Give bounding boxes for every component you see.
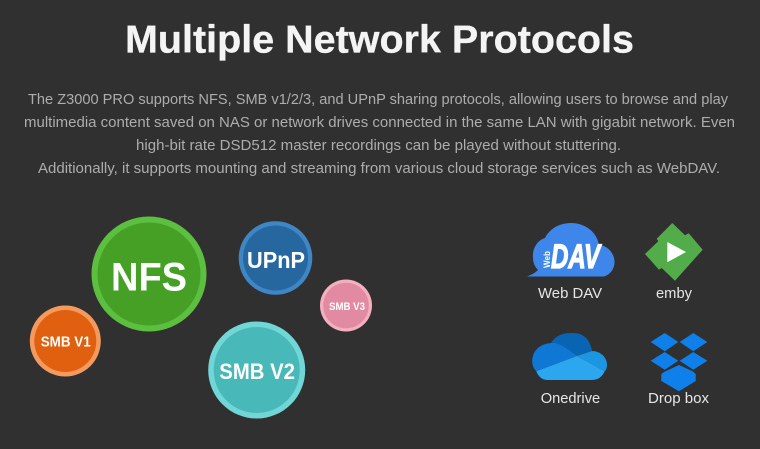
bubble: UPnP [239, 221, 312, 295]
icon: WebDAV cloud [527, 223, 614, 276]
bubble: SMB V2: SMB V2 [219, 359, 295, 384]
icon: emby [645, 223, 703, 281]
bubble: SMB V1: SMB V1 [41, 334, 91, 351]
protocol bubbles [30, 216, 372, 418]
label: Drop box: Drop box [648, 390, 709, 407]
description text block: high-bit rate DSD512 master recordings can be played without stuttering. [136, 137, 621, 154]
bubble: NFS: NFS [111, 256, 187, 300]
bubble: UPnP: UPnP [247, 247, 305, 273]
description text block [24, 91, 735, 177]
description text block: multimedia content saved on NAS or network drives connected in the same LAN with gigabit network. Even [24, 114, 735, 131]
title: Multiple Network Protocols [125, 18, 634, 62]
icon: WebDAV cloud: Web [542, 251, 552, 268]
label: Web DAV: Web DAV [538, 285, 602, 302]
bubble: SMB V2 [208, 322, 305, 418]
label: Onedrive: Onedrive [541, 390, 600, 407]
bubble: SMB V3: SMB V3 [329, 301, 365, 313]
icon: OneDrive cloud [532, 333, 607, 380]
icon: WebDAV cloud: DAV [551, 238, 602, 276]
label: emby: emby [656, 285, 692, 302]
icon: Dropbox [651, 333, 707, 391]
description text block: The Z3000 PRO supports NFS, SMB v1/2/3, and UPnP sharing protocols, allowing users to browse and play [28, 91, 728, 108]
bubble: SMB V1 [30, 306, 101, 376]
bubble: SMB V3 [320, 280, 372, 332]
description text block: Additionally, it supports mounting and streaming from various cloud storage services such as WebDAV. [38, 160, 720, 177]
bubble: NFS [92, 216, 206, 332]
